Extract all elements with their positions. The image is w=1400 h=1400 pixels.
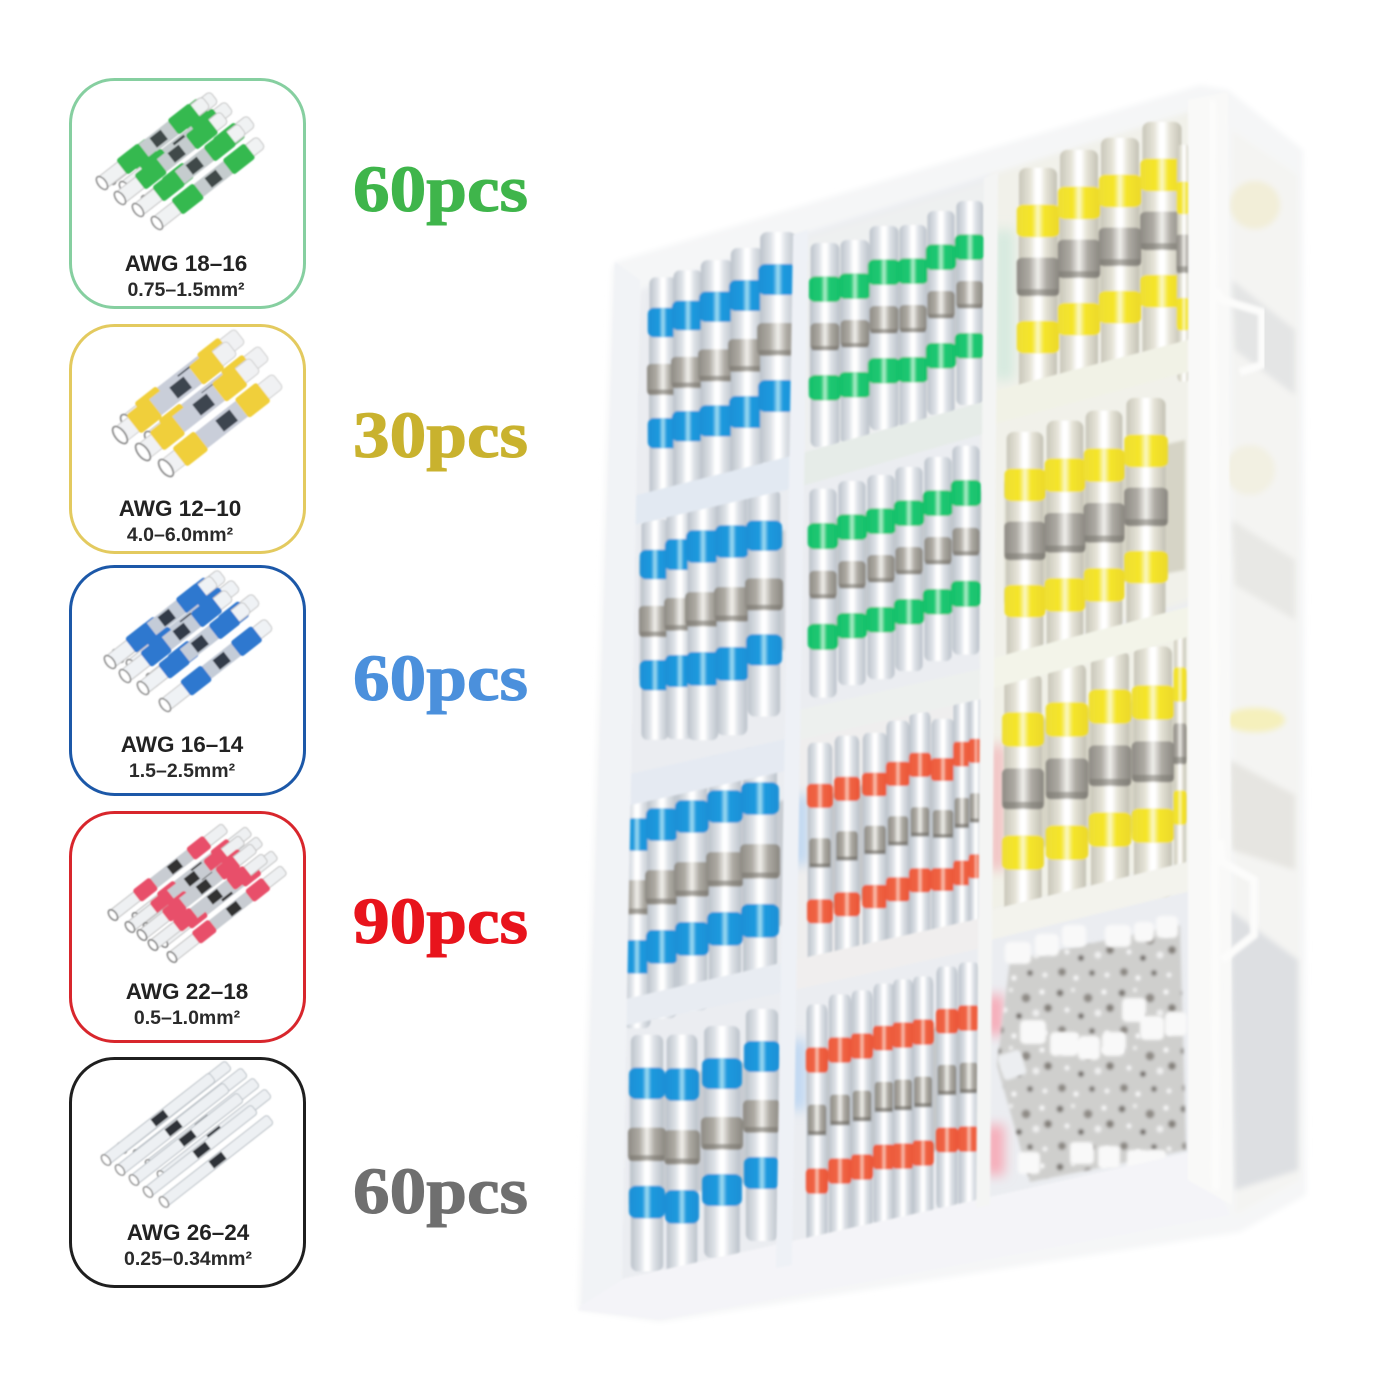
panel frame <box>70 566 304 794</box>
connectors: blue bin row 3 <box>621 749 780 1028</box>
panel: AWG 18-16 green connectors <box>70 80 304 308</box>
icon: clear connectors <box>100 1060 274 1209</box>
connectors: green bin row 2 <box>808 446 981 698</box>
label: wire size: 0.5–1.0mm² <box>134 1007 241 1029</box>
connectors: yellow bin row 1 <box>1017 122 1192 404</box>
label: AWG 16-14: AWG 16–14 <box>121 732 244 757</box>
lid latch outlines <box>1212 100 1262 1190</box>
connectors: blue bin row 2 <box>639 489 783 740</box>
panel frame <box>70 326 304 552</box>
connectors: clear bin <box>997 916 1187 1182</box>
connectors: red bin row 2 <box>806 962 980 1252</box>
tube shadows behind connectors <box>625 170 1185 1205</box>
label: wire size: 4.0–6.0mm² <box>127 524 234 546</box>
white heat-shrink bands <box>997 916 1187 1174</box>
connectors: yellow bin row 2 <box>1004 398 1168 668</box>
ghost colours seen through the dividers <box>790 230 1014 1175</box>
vertical bin walls <box>582 92 1232 1305</box>
panel frame <box>70 1058 304 1286</box>
connectors: red bin row 1 <box>807 698 984 979</box>
panel: AWG 12-10 yellow connectors <box>70 326 304 552</box>
quantity: 30pcs yellow: 30pcs <box>353 399 528 472</box>
quantity: 60pcs green: 60pcs <box>353 153 528 226</box>
transparent organizer box <box>578 85 1306 1322</box>
box body <box>578 85 1306 1322</box>
icon: blue connectors <box>101 567 275 715</box>
label: wire size: 0.75–1.5mm² <box>127 279 245 301</box>
quantity: 60pcs blue: 60pcs <box>353 642 528 715</box>
panel frame <box>70 80 304 308</box>
label: AWG 12-10: AWG 12–10 <box>119 496 241 521</box>
panel frame <box>70 812 304 1042</box>
panel: AWG 26-24 clear connectors <box>70 1058 304 1286</box>
icon: red connectors <box>106 822 289 965</box>
label: AWG 18-16: AWG 18–16 <box>125 251 247 276</box>
connectors: yellow bin row 3 <box>1002 628 1187 924</box>
connectors: blue bin row 1 <box>647 232 799 498</box>
quantity: 60pcs gray: 60pcs <box>353 1155 528 1228</box>
label: wire size: 0.25–0.34mm² <box>124 1248 252 1270</box>
label: AWG 26-24: AWG 26–24 <box>127 1220 250 1245</box>
panel: AWG 22-18 red connectors <box>70 812 304 1042</box>
connectors: blue bin row 4 <box>628 1009 781 1278</box>
connectors: green bin row 1 <box>809 201 985 447</box>
speckled tube bodies <box>997 925 1186 1182</box>
quantity: 90pcs red: 90pcs <box>353 885 528 958</box>
panel: AWG 16-14 blue connectors <box>70 566 304 794</box>
right side lid details <box>1225 181 1298 1190</box>
label: wire size: 1.5–2.5mm² <box>129 760 236 782</box>
label: AWG 22-18: AWG 22–18 <box>126 979 248 1004</box>
icon: yellow connectors <box>109 326 285 481</box>
horizontal shelf dividers <box>578 338 1230 1320</box>
icon: green connectors <box>93 89 267 233</box>
